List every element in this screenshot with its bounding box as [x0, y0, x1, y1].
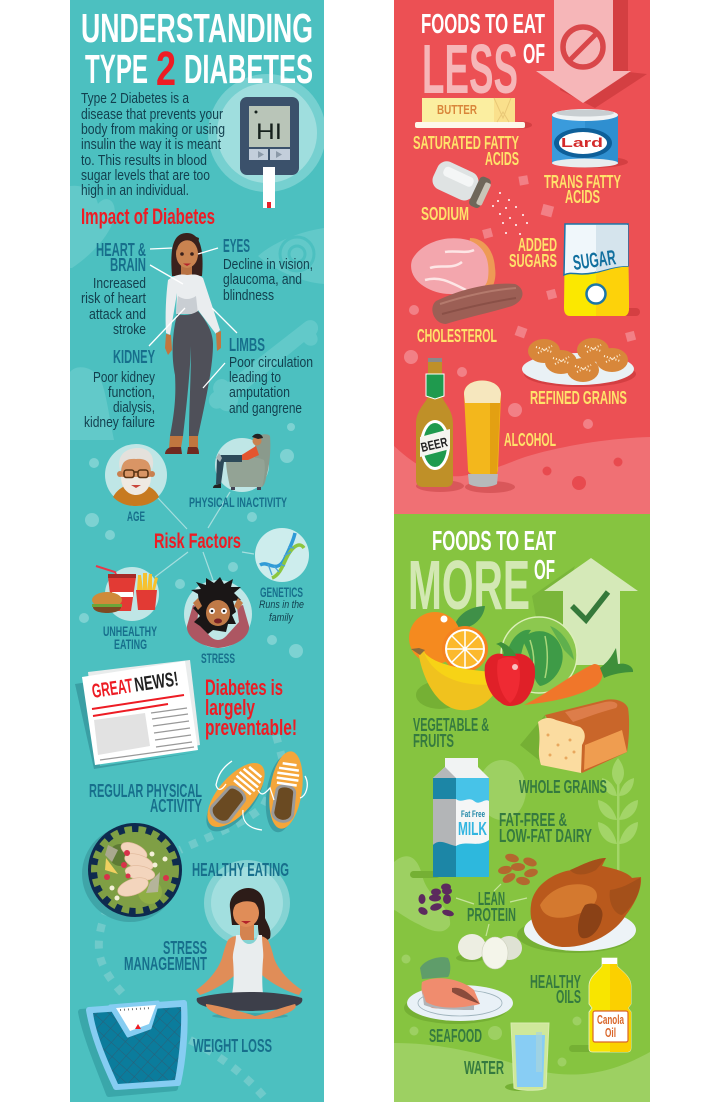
- icon: beer bottle and glass: BEER: [419, 434, 449, 455]
- icon: salt shaker: [429, 157, 528, 235]
- label: age: AGE: [127, 508, 145, 524]
- icon: lard can: [552, 109, 628, 168]
- callout: diabetes is largely preventable: [205, 675, 297, 740]
- label: limbs: amputation: [229, 385, 290, 401]
- icon: glucose meter: HI: [256, 119, 282, 144]
- heading: risk factors: Risk Factors: [154, 530, 241, 553]
- label: trans fatty acids: TRANS FATTY: [544, 172, 621, 192]
- figure: meditating woman: [196, 888, 302, 1019]
- label: cholesterol: CHOLESTEROL: [417, 326, 497, 346]
- lean protein connector lines: [456, 884, 527, 936]
- callout: diabetes is largely preventable: largely: [205, 695, 256, 720]
- label: kidney: Poor kidney: [93, 370, 156, 386]
- label: lean protein: PROTEIN: [467, 905, 516, 925]
- label: healthy oils: HEALTHY: [530, 972, 581, 992]
- label: limbs: leading to: [229, 370, 281, 386]
- up arrow with check mark: [532, 558, 638, 665]
- label: limbs: and gangrene: [229, 401, 302, 417]
- label: eyes: EYES: [223, 236, 250, 256]
- label: regular physical activity: ACTIVITY: [150, 796, 202, 816]
- label: added sugars: ADDED: [518, 235, 557, 255]
- wave: [394, 437, 650, 514]
- label: stress: STRESS: [201, 650, 235, 666]
- label: saturated fatty acids: [413, 133, 519, 169]
- label: unhealthy eating: [104, 626, 157, 649]
- label: vegetable and fruits: FRUITS: [413, 731, 454, 751]
- icon: butter: [415, 98, 532, 128]
- label: kidney: dialysis,: [113, 400, 155, 416]
- newspaper: [75, 660, 200, 769]
- icon: almonds: [497, 852, 539, 886]
- panel: understanding type 2 diabetes: [70, 0, 326, 1102]
- intro text: disease that prevents your: [81, 107, 223, 123]
- label: stress management: MANAGEMENT: [124, 954, 207, 974]
- label: genetics: [259, 584, 304, 624]
- icon: canola oil bottle: [569, 958, 631, 1052]
- label: kidney: [84, 347, 156, 431]
- label: seafood: SEAFOOD: [429, 1026, 482, 1046]
- label: healthy oils: OILS: [556, 987, 581, 1007]
- risk factor connector lines: [155, 492, 254, 580]
- icon: sugar bag: SUGAR: [571, 246, 617, 275]
- icon: roast chicken: [517, 858, 641, 953]
- label: genetics: GENETICS: [260, 584, 303, 600]
- panel: foods to eat less of: [394, 0, 650, 514]
- heading: impact of diabetes: Impact of Diabetes: [81, 204, 215, 229]
- icon: salmon plate: [404, 957, 513, 1024]
- title: 2: [156, 43, 176, 96]
- label: heart and brain: attack and: [89, 307, 146, 323]
- icon: canola oil bottle: Oil: [605, 1025, 616, 1040]
- label: heart and brain: Increased: [93, 276, 146, 292]
- label: heart and brain: [81, 240, 146, 338]
- icon: refined grains plate: [522, 338, 636, 387]
- intro text: body from making or using: [81, 122, 225, 138]
- label: alcohol: ALCOHOL: [504, 430, 556, 450]
- title: [82, 14, 312, 85]
- label: vegetable and fruits: VEGETABLE &: [413, 715, 489, 735]
- newspaper: GREAT: [90, 675, 134, 703]
- icon: milk carton: Fat Free: [461, 809, 485, 819]
- label: eyes: [224, 239, 312, 300]
- label: stress management: STRESS: [163, 938, 207, 958]
- panel: foods to eat more of: [394, 514, 650, 1102]
- label: healthy eating: HEALTHY EATING: [192, 860, 289, 880]
- label: limbs: LIMBS: [229, 335, 265, 355]
- label: weight loss: WEIGHT LOSS: [193, 1036, 272, 1056]
- label: heart and brain: BRAIN: [110, 255, 146, 275]
- wave: [394, 1043, 650, 1102]
- heading: foods to eat more of: MORE: [408, 546, 530, 624]
- label: healthy oils: [530, 972, 581, 1007]
- icon: fast food: [92, 566, 159, 621]
- newspaper: NEWS!: [133, 668, 180, 697]
- label: heart and brain: HEART &: [96, 240, 146, 260]
- label: genetics: Runs in the: [259, 599, 304, 611]
- title: TYPE: [85, 46, 148, 92]
- intro text: to. This results in blood: [81, 153, 207, 169]
- heading: foods to eat less of: LESS: [422, 30, 518, 108]
- icon: butter: BUTTER: [437, 103, 477, 117]
- label: kidney: function,: [108, 385, 155, 401]
- glow behind meter: [208, 74, 326, 192]
- icon: milk carton: [410, 758, 489, 878]
- icon: meat and sausage: [411, 238, 523, 324]
- callout: diabetes is largely preventable: Diabetes is: [205, 675, 283, 700]
- icon: weighing scale: [81, 1002, 185, 1094]
- decorative dots and squares: [404, 175, 636, 490]
- heading: foods to eat more of: [408, 525, 556, 624]
- label: eyes: glaucoma, and: [223, 272, 302, 288]
- heading: foods to eat more of: FOODS TO EAT: [432, 525, 556, 556]
- intro text: [81, 91, 225, 199]
- decorative bubbles: [79, 423, 303, 658]
- label: saturated fatty acids: SATURATED FATTY: [413, 133, 519, 153]
- label: physical inactivity: PHYSICAL INACTIVITY: [189, 494, 287, 510]
- icon: running shoes: [206, 751, 308, 832]
- callout lines: [149, 248, 237, 388]
- label: regular physical activity: REGULAR PHYSICAL: [89, 781, 202, 801]
- label: whole grains: WHOLE GRAINS: [519, 777, 607, 797]
- icon: milk carton: MILK: [458, 819, 487, 839]
- icon: sugar bag: [564, 224, 640, 316]
- label: trans fatty acids: ACIDS: [565, 187, 600, 207]
- icon: beer bottle and glass: [416, 358, 515, 493]
- background dashes: [99, 735, 284, 1102]
- label: fat-free and low-fat dairy: FAT-FREE &: [499, 810, 567, 830]
- intro text: insulin the way it is meant: [81, 137, 221, 153]
- label: sodium: SODIUM: [421, 204, 469, 224]
- label: regular physical activity: [90, 784, 202, 812]
- pepper: [485, 654, 535, 706]
- icon: person on armchair: [213, 434, 270, 492]
- background health shapes: [70, 186, 324, 440]
- icon: salad plate: [82, 823, 182, 922]
- label: refined grains: REFINED GRAINS: [530, 388, 627, 408]
- label: added sugars: SUGARS: [509, 251, 557, 271]
- icon: fruit and vegetables: [409, 606, 633, 710]
- label: trans fatty acids: [544, 172, 621, 207]
- label: limbs: Poor circulation: [229, 355, 313, 371]
- heading: foods to eat less of: FOODS TO EAT: [421, 8, 545, 39]
- icon: glass of water: [505, 1023, 549, 1091]
- label: kidney: KIDNEY: [113, 347, 155, 367]
- label: fat-free and low-fat dairy: LOW-FAT DAIRY: [499, 826, 592, 846]
- icon: beans: [417, 884, 455, 917]
- label: fat-free and low-fat dairy: [499, 810, 592, 846]
- arrow with no symbol: [536, 0, 647, 108]
- label: lean protein: [467, 889, 516, 925]
- icon: loaf of bread: [520, 699, 629, 773]
- carrot: [524, 664, 603, 705]
- label: eyes: blindness: [223, 288, 274, 304]
- icon: stressed person: [184, 577, 252, 648]
- background blobs and wheat: [394, 758, 638, 1066]
- icon: older man: [105, 444, 167, 506]
- label: added sugars: [509, 235, 557, 271]
- label: water: WATER: [464, 1058, 504, 1078]
- figure: woman: [165, 233, 221, 454]
- cabbage: [501, 617, 577, 693]
- label: vegetable and fruits: [413, 715, 489, 751]
- intro text: sugar levels that are too: [81, 168, 210, 184]
- icon: canola oil bottle: Canola: [597, 1012, 624, 1027]
- label: lean protein: LEAN: [478, 889, 505, 909]
- glow behind meditating woman: [204, 860, 290, 946]
- title: UNDERSTANDING: [81, 5, 313, 51]
- intro text: high in an individual.: [81, 183, 189, 199]
- heading: foods to eat less of: [421, 8, 545, 108]
- icon: eggs: [456, 934, 522, 969]
- icon: lard can: Lard: [561, 135, 603, 150]
- label: heart and brain: stroke: [113, 322, 146, 338]
- label: eyes: Decline in vision,: [223, 257, 313, 273]
- label: unhealthy eating: UNHEALTHY: [103, 623, 157, 639]
- background eye: [280, 237, 314, 271]
- label: saturated fatty acids: ACIDS: [485, 149, 519, 169]
- callout: diabetes is largely preventable: preventable!: [205, 715, 297, 740]
- heading: foods to eat less of: OF: [523, 38, 545, 69]
- label: heart and brain: risk of heart: [81, 291, 146, 307]
- label: limbs: [229, 335, 313, 417]
- heading: foods to eat more of: OF: [534, 554, 555, 585]
- title: DIABETES: [184, 46, 313, 92]
- label: kidney: kidney failure: [84, 415, 155, 431]
- intro text: Type 2 Diabetes is a: [81, 91, 190, 107]
- label: stress management: [124, 941, 207, 970]
- label: unhealthy eating: EATING: [114, 636, 147, 652]
- icon: dna: [255, 528, 309, 582]
- label: genetics: family: [269, 612, 294, 624]
- icon: glucose meter: [240, 97, 299, 208]
